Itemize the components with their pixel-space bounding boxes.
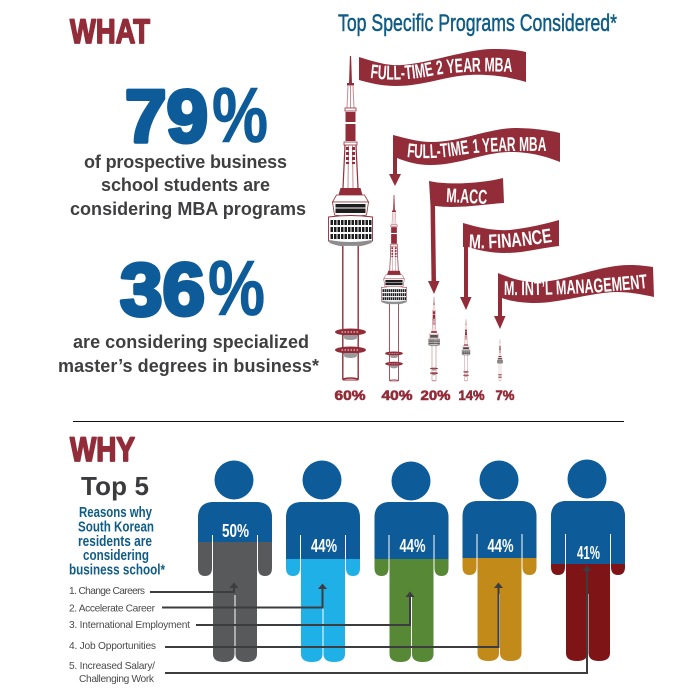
text block: reasons: Reasons why: [79, 505, 152, 521]
reason labels: 2. Accelerate Career: [69, 604, 156, 614]
person 4: job opportunities: 44%: [488, 536, 514, 556]
reason labels: Challenging Work: [79, 674, 155, 685]
person 4: job opportunities: [462, 460, 536, 661]
heading: WHY: WHY: [70, 431, 135, 469]
text block: reasons: [69, 505, 165, 578]
banner with arrow: M.ACC: [428, 178, 504, 294]
arrow: change careers: [150, 582, 238, 592]
text block: reasons: considering: [83, 548, 149, 564]
text block: reasons: business school*: [69, 562, 165, 578]
text block: specialized master's degrees: [58, 332, 319, 376]
banner with arrow: M.ACC: M.ACC: [446, 188, 487, 204]
stat: 79 percent: %: [212, 71, 268, 159]
banner: full-time 2 year MBA: FULL-TIME 2 YEAR MBA: [370, 58, 512, 80]
tower: 14 percent: [462, 319, 470, 381]
stat: 36 percent: 36: [120, 248, 205, 331]
reason labels: 5. Increased Salary/: [69, 661, 155, 672]
person 5: increased salary: 41%: [577, 543, 600, 563]
heading: Top 5: Top 5: [81, 471, 149, 501]
tower: 40 percent: [381, 195, 407, 381]
stat: 36 percent: [120, 244, 265, 332]
person 2: accelerate career: 44%: [311, 536, 337, 556]
tower percentages: 7%: [496, 388, 514, 403]
tower percentages: 60%: [334, 388, 366, 403]
person 5: increased salary: [551, 460, 625, 661]
arrow: international employment: [196, 592, 414, 625]
arrow: increased salary: [165, 566, 592, 673]
text block: specialized master's degrees: master’s degrees in business*: [58, 356, 319, 376]
tower: 20 percent: [428, 297, 440, 381]
text block: MBA programs: considering MBA programs: [70, 199, 306, 219]
text block: MBA programs: school students are: [101, 175, 270, 195]
tower percentages: 40%: [382, 388, 412, 403]
person 1: change careers: [198, 460, 272, 662]
tower percentages: 14%: [458, 388, 484, 403]
reason labels: [69, 586, 190, 685]
stat: 79 percent: [125, 71, 268, 159]
text block: reasons: residents are: [78, 534, 152, 550]
reason labels: 3. International Employment: [69, 620, 190, 631]
text block: MBA programs: [70, 152, 306, 219]
stat: 79 percent: 79: [125, 75, 208, 158]
tower percentages: 20%: [420, 388, 450, 403]
text block: reasons: South Korean: [78, 520, 154, 536]
text block: specialized master's degrees: are considering specialized: [73, 332, 309, 352]
tower percentages: [334, 388, 514, 403]
person 1: change careers: 50%: [222, 521, 249, 541]
banner with arrow: full-time 1 year MBA: [389, 128, 560, 186]
banner with arrow: M. international management: M. INT’L MANAGEMENT: [504, 274, 646, 296]
banner with arrow: M. finance: [460, 220, 559, 310]
tower: 60 percent: [328, 56, 372, 380]
person 3: international employment: 44%: [400, 536, 426, 556]
reason labels: 4. Job Opportunities: [69, 641, 156, 652]
person 3: international employment: [374, 462, 448, 662]
arrow: job opportunities: [165, 582, 503, 647]
reason labels: 1. Change Careers: [69, 586, 145, 597]
tower: 7 percent: [497, 339, 503, 381]
banner with arrow: M. finance: M. FINANCE: [470, 228, 552, 248]
arrow: accelerate career: [162, 584, 327, 608]
heading: WHAT: WHAT: [70, 13, 150, 51]
stat: 36 percent: %: [208, 244, 265, 332]
text block: MBA programs: of prospective business: [84, 152, 287, 172]
banner with arrow: full-time 1 year MBA: FULL-TIME 1 YEAR MBA: [408, 137, 546, 158]
person 2: accelerate career: [286, 460, 360, 662]
banner with arrow: M. international management: [494, 265, 654, 329]
